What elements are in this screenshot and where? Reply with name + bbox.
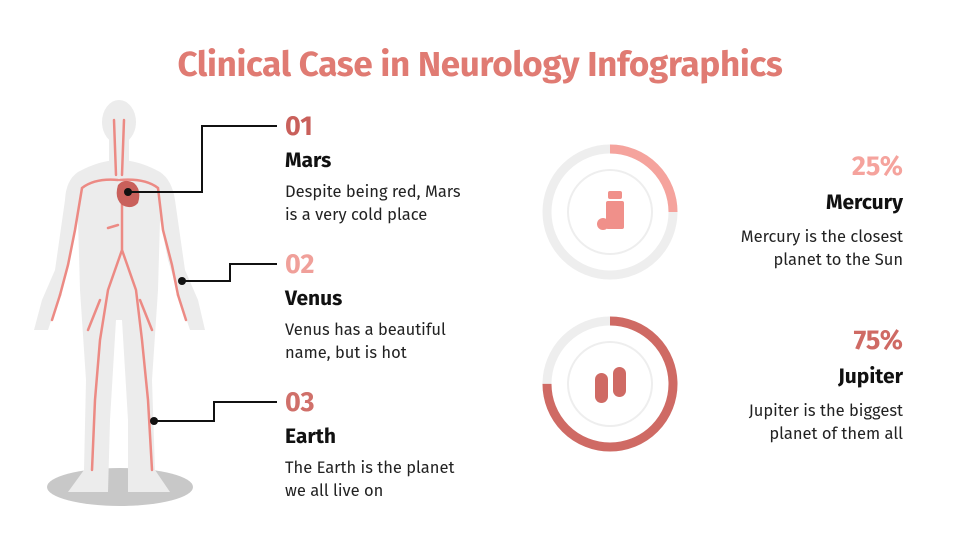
item 02: 02 [285,249,314,281]
donut 75% [547,321,673,447]
icon: pill bottle [597,191,624,230]
stat mercury [741,151,904,270]
item 01: is a very cold place [285,206,427,225]
item 02: Venus [285,285,342,311]
stat jupiter: planet of them all [769,425,903,444]
stat jupiter: 75% [854,325,903,357]
heart [117,181,139,207]
item 02: Venus has a beautiful [285,321,446,340]
donut 25% [547,149,673,275]
stat mercury: Mercury [826,189,903,215]
stat jupiter: Jupiter is the biggest [749,402,903,421]
icon: capsules [595,367,626,403]
stat mercury: 25% [852,151,903,183]
title: Clinical Case in Neurology Infographics [177,44,783,86]
item 02 [284,249,446,363]
item 03: The Earth is the planet [285,459,454,478]
item 02: name, but is hot [285,344,407,363]
item 01: Mars [285,147,331,173]
stat jupiter: Jupiter [838,363,903,389]
vessels [52,120,186,470]
item 01: 01 [285,111,313,143]
stat jupiter [748,325,904,444]
donut charts [542,144,678,452]
connectors [128,126,277,421]
body illustration [34,100,277,506]
shadow [47,468,193,506]
item 03: 03 [285,387,315,419]
stat mercury: planet to the Sun [774,251,903,270]
item 01: Despite being red, Mars [285,183,461,202]
stat mercury: Mercury is the closest [741,228,903,247]
item 03 [285,387,454,501]
item 03: Earth [285,423,336,449]
item 01 [285,111,461,225]
silhouette [34,100,205,492]
item 03: we all live on [285,482,383,501]
